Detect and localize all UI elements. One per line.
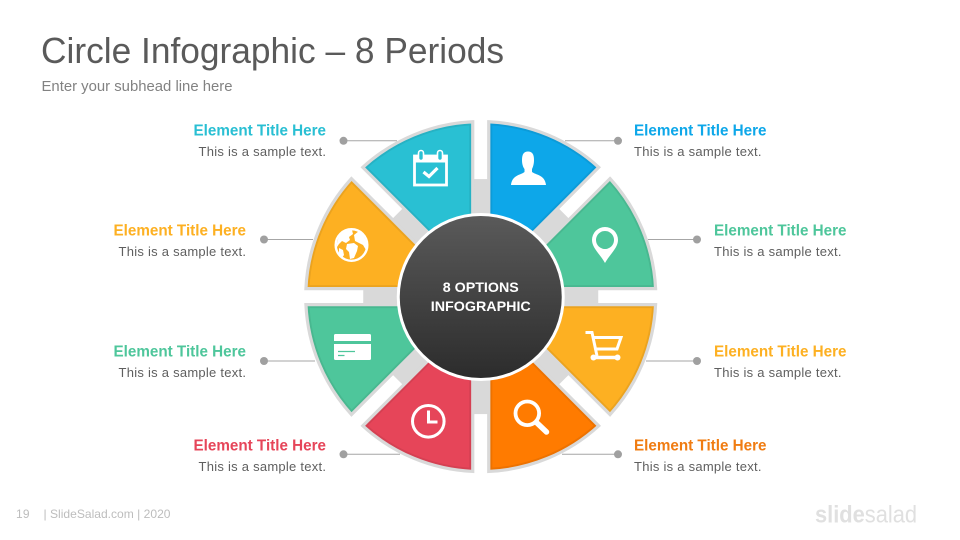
- wedge: green left: [274, 227, 461, 415]
- title: Circle Infographic – 8 Periods: [41, 30, 504, 71]
- callout: upper right green: Element Title Here: [714, 222, 847, 240]
- callout: top left cyan: Element Title Here: [194, 122, 326, 140]
- icon: globe: [336, 229, 367, 261]
- icon: magnifier: [516, 402, 546, 432]
- icon: shopping cart: [586, 332, 621, 360]
- callout: upper right green: [648, 222, 847, 259]
- callout: bottom left red: Element Title Here: [194, 438, 326, 454]
- callout: bottom right orange: This is a sample text.: [634, 459, 762, 474]
- callout: lower left green: This is a sample text.: [118, 365, 246, 380]
- callout: top right blue: Element Title Here: [634, 122, 767, 140]
- callout: upper left yellow: Element Title Here: [114, 222, 246, 240]
- icon: clock: [412, 406, 444, 437]
- center circle: [397, 213, 565, 381]
- callout: upper right green: This is a sample text.: [714, 244, 842, 259]
- callout: lower left green: Element Title Here: [114, 344, 246, 360]
- callout: lower right yellow: [646, 344, 847, 380]
- center circle: 8 OPTIONS: [443, 279, 519, 295]
- center circle: INFOGRAPHIC: [431, 298, 531, 314]
- callout: lower right yellow: Element Title Here: [714, 344, 847, 360]
- wedge: orange: [411, 316, 599, 504]
- logo: slidesalad: [815, 502, 917, 528]
- icon: person: [511, 152, 546, 185]
- footer: source: | SlideSalad.com | 2020: [44, 507, 171, 521]
- callout: top left cyan: This is a sample text.: [198, 144, 326, 159]
- wedge: blue: [489, 122, 599, 277]
- icon: calendar: [414, 150, 447, 185]
- wedge: green right: [500, 179, 688, 366]
- wedge: yellow left: [306, 179, 461, 289]
- wedge: cyan: [363, 90, 551, 277]
- callout: top right blue: [565, 122, 767, 159]
- wedge: red: [363, 316, 473, 471]
- callout: bottom right orange: [562, 438, 767, 474]
- callout: top right blue: This is a sample text.: [634, 144, 762, 159]
- footer: page number: 19: [16, 507, 30, 521]
- icon: location pin: [592, 227, 618, 263]
- callout: bottom left red: [194, 438, 400, 474]
- callout: lower left green: [114, 344, 315, 380]
- spoke bars: [363, 179, 598, 414]
- callout: lower right yellow: This is a sample text.: [714, 365, 842, 380]
- callout: upper left yellow: This is a sample text.: [118, 244, 246, 259]
- callout: bottom left red: This is a sample text.: [198, 459, 326, 474]
- icon: credit card: [334, 334, 371, 360]
- callout: bottom right orange: Element Title Here: [634, 438, 767, 454]
- callout: upper left yellow: [114, 222, 313, 259]
- subhead: Enter your subhead line here: [42, 79, 232, 95]
- callout: top left cyan: [194, 122, 397, 159]
- wedge: yellow right: [500, 305, 656, 415]
